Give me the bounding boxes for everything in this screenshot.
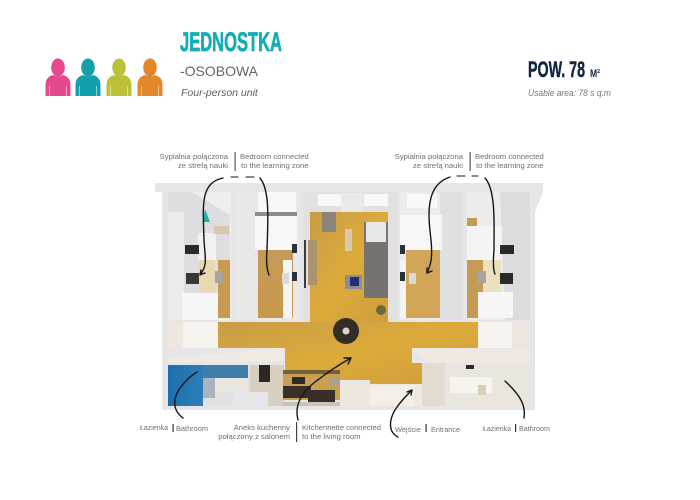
- arrows: [175, 176, 524, 437]
- label: bathroom right: Bathroom: [519, 424, 550, 433]
- area heading: POW. 78: [528, 57, 585, 82]
- label: bedroom right: to the learning zone: [476, 161, 544, 170]
- label: bedroom left: to the learning zone: [241, 161, 309, 170]
- english subtitle: Four-person unit: [181, 87, 259, 99]
- label: kitchenette: [218, 422, 381, 442]
- label: bedroom right: [395, 152, 544, 171]
- kitchen: [233, 365, 370, 410]
- right bathroom: [445, 365, 530, 405]
- usable area text: Usable area: 78 s q.m: [528, 88, 611, 98]
- dining table: [333, 318, 359, 344]
- label: bathroom left: Bathroom: [176, 424, 208, 433]
- subtitle: -OSOBOWA: [180, 63, 259, 79]
- label: entrance: Wejście: [395, 425, 421, 434]
- entrance: [340, 363, 445, 406]
- kitchen counter left: [168, 348, 285, 362]
- arrow: bedroom 4: [485, 178, 495, 274]
- outer walls: [155, 183, 543, 410]
- label: kitchenette: połączony z salonem: [218, 432, 290, 441]
- label: bedroom left: Bedroom connected: [240, 152, 309, 161]
- bedroom 2: [235, 192, 299, 320]
- label: bedroom left: [160, 152, 309, 171]
- title: JEDNOSTKA: [180, 27, 282, 57]
- label: bedroom right: Sypialnia połączona: [395, 152, 464, 161]
- label: bathroom right: Łazienka: [483, 424, 512, 433]
- arrow: top dashes left: [231, 176, 254, 178]
- label: kitchenette: to the living room: [302, 432, 361, 441]
- bedroom 4: [467, 192, 530, 320]
- left bathroom: [168, 365, 250, 406]
- living room: [303, 192, 398, 324]
- floor plan: [155, 183, 543, 410]
- label: entrance: [395, 424, 460, 434]
- arrow: bedroom 1: [200, 178, 223, 275]
- lower wood floor: [218, 322, 478, 385]
- label: bedroom right: ze strefą nauki: [413, 161, 463, 170]
- label: bathroom right: [483, 424, 550, 433]
- arrow: kitchenette: [297, 358, 351, 420]
- label: kitchenette: Aneks kuchenny: [234, 423, 290, 432]
- label: bedroom right: Bedroom connected: [475, 152, 544, 161]
- label: bedroom left: Sypialnia połączona: [160, 152, 229, 161]
- arrow: bathroom right: [505, 381, 524, 418]
- arrow: bedroom 3: [427, 177, 450, 273]
- area unit: M²: [590, 68, 600, 80]
- label: bedroom left: ze strefą nauki: [178, 161, 228, 170]
- arrow: entrance: [390, 390, 412, 437]
- label: bathroom left: Łazienka: [140, 423, 169, 432]
- bedroom 3: [400, 192, 463, 320]
- label: bathroom left: [140, 423, 208, 433]
- bedroom 1: [168, 192, 231, 320]
- kitchen counter right: [412, 349, 530, 363]
- arrow: bathroom left: [175, 372, 197, 418]
- plant: [376, 305, 386, 315]
- arrow: bedroom 2: [260, 178, 269, 275]
- label: entrance: Entrance: [431, 425, 460, 434]
- label: kitchenette: Kitchennette connected: [302, 423, 381, 432]
- icon: four people: [46, 58, 162, 96]
- arrow: top dashes right: [457, 175, 478, 177]
